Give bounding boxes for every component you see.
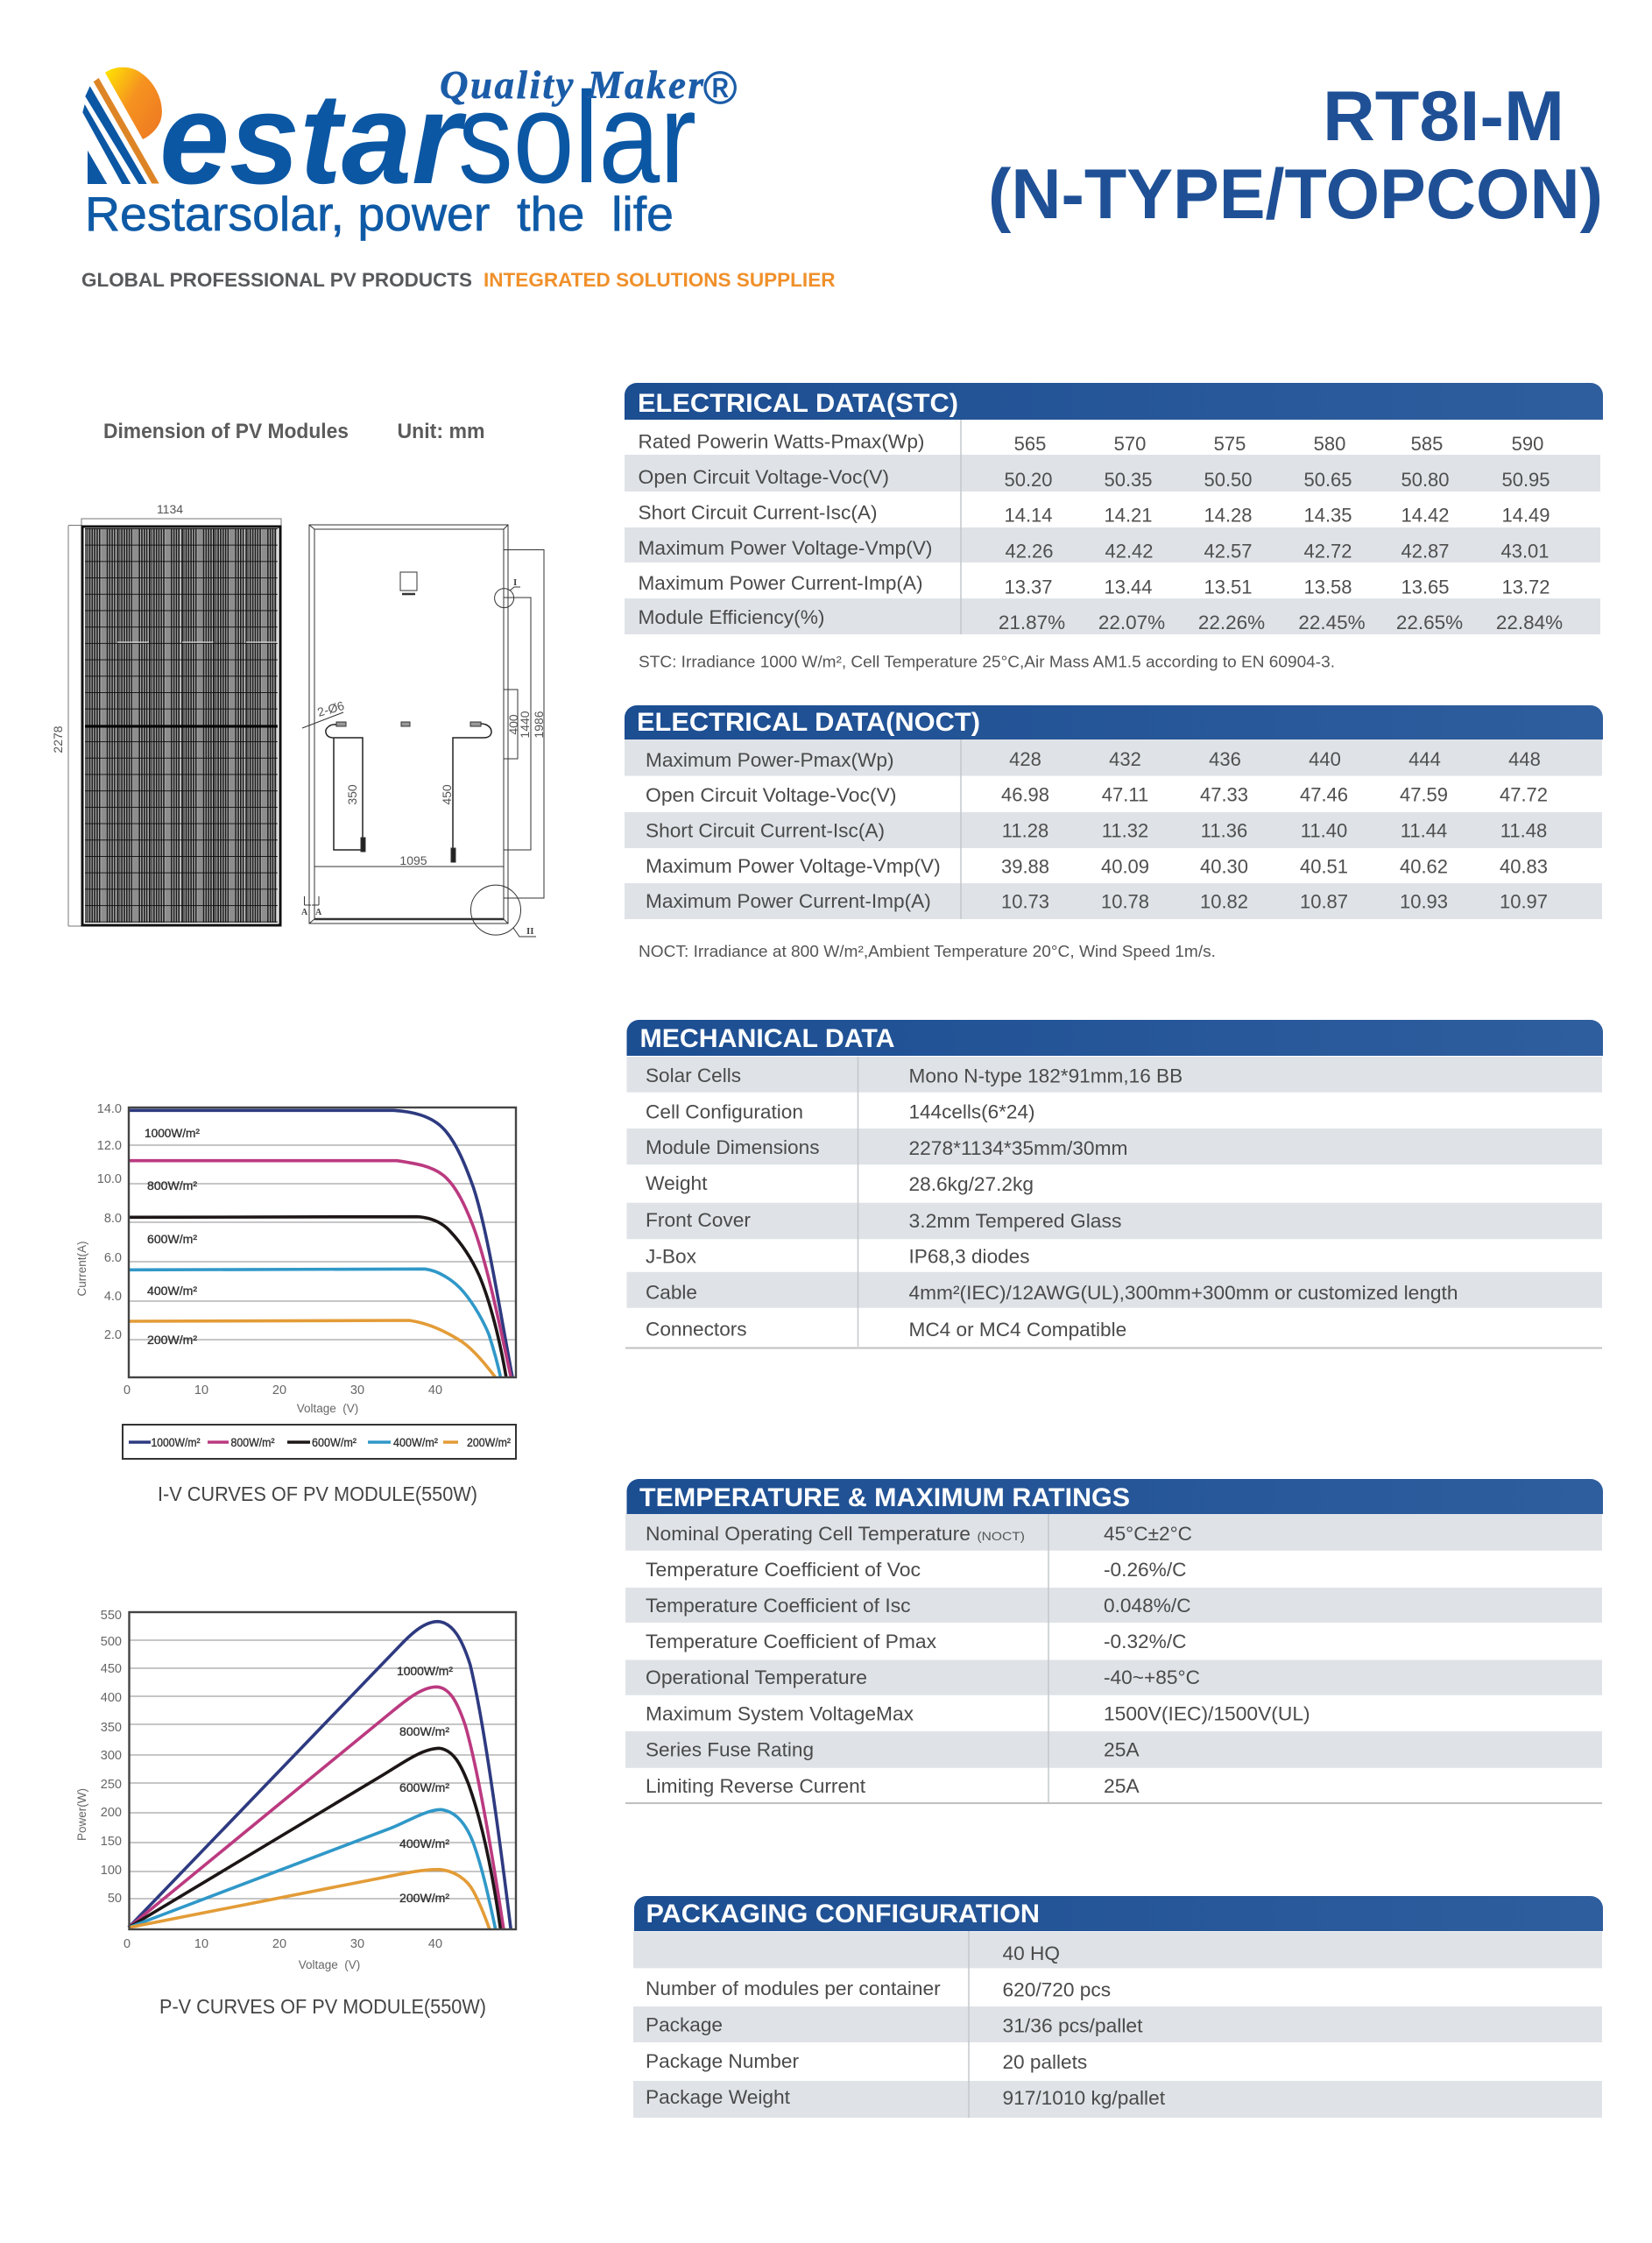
- row: efficiency: 22.26%: [1198, 612, 1265, 633]
- heading: dimensions: Dimension of PV Modules: [103, 420, 349, 443]
- curves: P-V: [129, 1622, 511, 1929]
- row: Imp: 10.97: [1500, 890, 1548, 913]
- row: weight: Weight: [646, 1172, 708, 1194]
- row: efficiency: 22.45%: [1298, 612, 1366, 633]
- row: rated power: Rated Powerin Watts-Pmax(Wp): [638, 431, 925, 452]
- row: Isc coefficient: 0.048%/C: [1104, 1595, 1191, 1617]
- row: efficiency: 21.87%: [999, 612, 1065, 633]
- title: (N-TYPE/TOPCON): [988, 155, 1603, 234]
- row: Isc: [638, 501, 1550, 526]
- row: Pmax coefficient: Temperature Coefficient of Pmax: [646, 1631, 937, 1652]
- row: Imp: Maximum Power Current-Imp(A): [646, 890, 931, 912]
- plot grid: [129, 1640, 516, 1899]
- row: Isc: 14.49: [1501, 505, 1550, 526]
- heading: packaging: PACKAGING CONFIGURATION: [646, 1900, 1040, 1928]
- note: NOCT conditions: NOCT: Irradiance at 800 W/m²,Ambient Temperature 20°C, Wind Speed 1m/s.: [639, 943, 1216, 960]
- heading: packaging: [634, 1896, 1603, 1931]
- panel: mechanical data: [625, 1020, 1603, 1348]
- company strapline: GLOBAL PROFESSIONAL PV PRODUCTS: [81, 269, 472, 291]
- panel: electrical data STC: [625, 383, 1603, 671]
- y axis labels: 4.0: [104, 1290, 122, 1304]
- caption: I-V curves: I-V CURVES OF PV MODULE(550W): [158, 1482, 477, 1505]
- row: Isc coefficient: Temperature Coefficient of Isc: [646, 1595, 911, 1617]
- row: rated power: 585: [1411, 433, 1443, 455]
- registered mark: ®: [703, 63, 737, 114]
- row: Voc: 50.80: [1401, 469, 1450, 491]
- row: cell configuration: 144cells(6*24): [909, 1100, 1035, 1123]
- heading: STC: ELECTRICAL DATA(STC): [638, 389, 958, 418]
- row: modules per container: [646, 1978, 1111, 2001]
- row: Vmp: 42.87: [1401, 540, 1450, 563]
- row: Imp: [638, 572, 1550, 598]
- row: J-box: IP68,3 diodes: [909, 1246, 1030, 1267]
- row: package weight: 917/1010 kg/pallet: [1002, 2087, 1166, 2109]
- y axis labels: [75, 1102, 122, 1342]
- curve labels: 600W/m²: [147, 1233, 198, 1246]
- rear view drawing: 1440: [518, 711, 532, 739]
- row: Imp: 10.87: [1300, 890, 1348, 913]
- row: rated power: 590: [1512, 433, 1543, 455]
- rear view drawing: A: [315, 908, 322, 917]
- y axis labels: 8.0: [104, 1212, 122, 1226]
- row: Vmp: 43.01: [1500, 540, 1550, 563]
- row: NOCT: (NOCT): [978, 1529, 1025, 1543]
- y axis labels: 10.0: [97, 1172, 122, 1186]
- rear view drawing: 1986: [532, 711, 546, 739]
- row: weight: [646, 1172, 1034, 1195]
- x axis labels: 0: [124, 1937, 131, 1951]
- row: rated power: [638, 431, 1543, 455]
- row: front cover: [646, 1209, 1121, 1232]
- row: Vmp: [646, 855, 1548, 878]
- row: reverse current: [646, 1775, 1140, 1797]
- x axis labels: 10: [194, 1383, 208, 1397]
- rear view drawing: 400: [506, 714, 520, 735]
- row: Voc coefficient: -0.26%/C: [1104, 1559, 1186, 1581]
- row: Isc: 14.21: [1104, 505, 1153, 526]
- rear view drawing: 450: [440, 784, 454, 805]
- panel: electrical data NOCT: [625, 705, 1603, 960]
- x axis labels: [124, 1383, 442, 1415]
- caption: P-V curves: P-V CURVES OF PV MODULE(550W): [159, 1995, 486, 2018]
- curve labels: 400W/m²: [399, 1837, 450, 1850]
- row: Imp: 13.37: [1004, 577, 1053, 598]
- row: series fuse: Series Fuse Rating: [646, 1738, 814, 1761]
- front view drawing: [51, 502, 281, 926]
- curve labels: 1000W/m²: [145, 1127, 200, 1140]
- row: Isc: 14.14: [1004, 505, 1053, 526]
- row: Voc: 47.46: [1300, 783, 1348, 806]
- row: NOCT: 45°C±2°C: [1104, 1523, 1192, 1545]
- title: RT8I-M: [1323, 77, 1564, 156]
- row: module dimensions: Module Dimensions: [646, 1136, 820, 1158]
- row: Isc: Short Circuit Current-Isc(A): [638, 501, 878, 524]
- curve labels: [145, 1127, 200, 1347]
- row: Vmp: 42.42: [1105, 540, 1154, 563]
- row: cable: Cable: [646, 1281, 697, 1304]
- y axis labels: Power(W): [75, 1788, 88, 1841]
- row: Voc: 47.33: [1200, 783, 1248, 806]
- row: Voc: 46.98: [1001, 783, 1049, 806]
- chart: I-V curves: [75, 1102, 516, 1505]
- row: Vmp: 42.57: [1204, 540, 1253, 563]
- row: Pmax: [646, 748, 1541, 771]
- row: efficiency: 22.65%: [1396, 612, 1463, 633]
- rear view drawing: 1095: [399, 853, 427, 867]
- row: Imp: 13.44: [1104, 577, 1153, 598]
- curve labels: 200W/m²: [147, 1334, 198, 1347]
- panel: packaging configuration: [633, 1896, 1603, 2118]
- row: Vmp: 40.83: [1500, 855, 1548, 878]
- row: Pmax: 448: [1508, 748, 1541, 770]
- curve labels: 400W/m²: [147, 1284, 198, 1298]
- row: weight: 28.6kg/27.2kg: [909, 1173, 1034, 1195]
- row: front cover: 3.2mm Tempered Glass: [909, 1210, 1121, 1232]
- row: Vmp: 42.72: [1303, 540, 1352, 563]
- y axis labels: 6.0: [104, 1251, 122, 1265]
- row: front cover: Front Cover: [646, 1209, 751, 1231]
- row: Voc: 47.72: [1500, 783, 1548, 806]
- row: rated power: 580: [1314, 433, 1345, 455]
- row: Imp: 10.73: [1001, 890, 1049, 913]
- row: efficiency: 22.07%: [1098, 612, 1165, 633]
- row: Imp: Maximum Power Current-Imp(A): [638, 572, 923, 594]
- row: cell configuration: [646, 1100, 1035, 1123]
- row: Isc: 11.48: [1500, 820, 1547, 841]
- heading: temperature: TEMPERATURE & MAXIMUM RATINGS: [639, 1483, 1130, 1512]
- row: series fuse: [646, 1738, 1140, 1761]
- heading: mechanical: [627, 1020, 1603, 1056]
- row: Imp: [646, 890, 1548, 913]
- rear view drawing: A: [301, 908, 308, 917]
- row: package: 31/36 pcs/pallet: [1002, 2015, 1143, 2036]
- logo: Restarsolar: [82, 63, 737, 241]
- row: efficiency: [638, 606, 1563, 633]
- y axis labels: 14.0: [97, 1102, 122, 1116]
- row: Isc: 11.28: [1002, 820, 1048, 841]
- row: Vmp: Maximum Power Voltage-Vmp(V): [646, 855, 941, 877]
- row: Voc coefficient: [646, 1559, 1186, 1581]
- y axis labels: 250: [101, 1778, 122, 1792]
- row: Isc: Short Circuit Current-Isc(A): [646, 820, 885, 841]
- icon: blue stripes: [82, 86, 147, 184]
- x axis labels: 30: [350, 1383, 364, 1397]
- row: J-box: [646, 1246, 1030, 1267]
- row: Pmax: 436: [1209, 748, 1241, 770]
- y axis labels: 450: [101, 1662, 122, 1676]
- y axis labels: 50: [108, 1892, 122, 1906]
- row: Voc: [638, 466, 1550, 491]
- row: operational temperature: -40~+85°C: [1104, 1666, 1200, 1688]
- rear view drawing: I: [513, 577, 517, 588]
- row: module dimensions: 2278*1134*35mm/30mm: [909, 1137, 1128, 1159]
- logo word: solar: solar: [458, 66, 696, 210]
- row: modules per container: 620/720 pcs: [1002, 1978, 1111, 2001]
- row: reverse current: 25A: [1104, 1775, 1140, 1797]
- row: rated power: 575: [1214, 433, 1246, 455]
- y axis labels: 550: [101, 1609, 122, 1623]
- panel: dimensions of PV modules: [51, 420, 546, 937]
- row: Isc: [646, 820, 1547, 841]
- rear view drawing: [301, 525, 546, 937]
- row: efficiency: 22.84%: [1496, 612, 1563, 633]
- row: maximum system voltage: [646, 1703, 1310, 1724]
- y axis labels: 300: [101, 1749, 122, 1763]
- row: Imp: 10.93: [1400, 890, 1448, 913]
- front view drawing: 2278: [51, 725, 65, 754]
- row: package number: Package Number: [646, 2050, 800, 2072]
- row: Voc: 50.50: [1204, 469, 1253, 491]
- y axis labels: 400: [101, 1691, 122, 1705]
- x axis labels: Voltage (V): [299, 1958, 360, 1971]
- x axis labels: 10: [194, 1937, 208, 1951]
- x axis labels: 20: [272, 1937, 286, 1951]
- row: Isc: 11.44: [1401, 820, 1447, 841]
- row: NOCT: Nominal Operating Cell Temperature: [646, 1523, 971, 1545]
- row: Voc: Open Circuit Voltage-Voc(V): [638, 466, 889, 488]
- row: Isc: 14.42: [1401, 505, 1450, 526]
- panel: temperature and maximum ratings: [625, 1479, 1603, 1803]
- row: Imp: 13.65: [1401, 577, 1450, 598]
- rear view drawing: 2-Ø6: [315, 698, 346, 719]
- rear view drawing: II: [526, 926, 534, 937]
- row: Imp: 10.82: [1200, 890, 1248, 913]
- x axis labels: 30: [350, 1937, 364, 1951]
- plot grid and frame: [129, 1145, 516, 1340]
- x axis labels: Voltage (V): [297, 1402, 358, 1415]
- row: Isc: 14.35: [1303, 505, 1352, 526]
- y axis labels: Current(A): [75, 1241, 88, 1297]
- y axis labels: 500: [101, 1635, 122, 1649]
- row: package weight: [646, 2086, 1166, 2109]
- row: Voc: 50.65: [1303, 469, 1352, 491]
- y axis labels: 350: [101, 1721, 122, 1735]
- row: Isc: 14.28: [1204, 505, 1253, 526]
- row: Voc coefficient: Temperature Coefficient of Voc: [646, 1559, 921, 1581]
- y axis labels: 200: [101, 1806, 122, 1820]
- row: Voc: 50.35: [1104, 469, 1153, 491]
- row: cable: 4mm²(IEC)/12AWG(UL),300mm+300mm or customized length: [909, 1282, 1458, 1304]
- row: rated power: 565: [1014, 433, 1046, 455]
- row: solar cells: [646, 1065, 1183, 1086]
- row: Voc: 47.11: [1102, 783, 1148, 806]
- legend: 600W/m²: [312, 1436, 357, 1449]
- row: reverse current: Limiting Reverse Current: [646, 1775, 866, 1797]
- row: cable: [646, 1281, 1458, 1304]
- row: Pmax: 428: [1009, 748, 1041, 770]
- curve labels: 1000W/m²: [397, 1665, 454, 1678]
- row: package number: 20 pallets: [1002, 2051, 1087, 2073]
- row: Voc: 50.95: [1501, 469, 1550, 491]
- legend: 400W/m²: [393, 1436, 438, 1449]
- icon: orange stripe: [94, 78, 159, 184]
- row: Isc coefficient: [646, 1595, 1191, 1617]
- logo tagline: Restarsolar, power the life: [85, 187, 674, 241]
- curves: I-V: [129, 1110, 512, 1377]
- rear view drawing: 350: [345, 784, 359, 805]
- row: Pmax: Maximum Power-Pmax(Wp): [646, 749, 894, 771]
- row: maximum system voltage: Maximum System VoltageMax: [646, 1703, 914, 1724]
- row: Vmp: [638, 537, 1550, 563]
- legend: 200W/m²: [467, 1436, 511, 1449]
- row: Isc: 11.32: [1102, 820, 1148, 841]
- chart: P-V curves: [75, 1609, 516, 2018]
- row: series fuse: 25A: [1104, 1738, 1140, 1761]
- row: NOCT: [646, 1523, 1192, 1545]
- heading: dimensions: [103, 420, 485, 443]
- row: J-box: J-Box: [646, 1246, 697, 1267]
- icon: sun: [105, 67, 162, 139]
- curve labels: 800W/m²: [399, 1725, 450, 1738]
- row: Pmax coefficient: [646, 1631, 1186, 1652]
- row: Pmax coefficient: -0.32%/C: [1104, 1631, 1186, 1652]
- row: solar cells: Solar Cells: [646, 1065, 741, 1086]
- row: Imp: 13.51: [1204, 577, 1253, 598]
- row: connectors: MC4 or MC4 Compatible: [909, 1319, 1126, 1341]
- row: Vmp: Maximum Power Voltage-Vmp(V): [638, 537, 932, 559]
- row: Imp: 13.72: [1501, 577, 1550, 598]
- row: Vmp: 42.26: [1005, 540, 1054, 563]
- note: STC conditions: STC: Irradiance 1000 W/m², Cell Temperature 25°C,Air Mass AM1.5 according to EN 60904-3.: [639, 654, 1335, 671]
- row: modules per container: Number of modules per container: [646, 1978, 941, 1999]
- row: solar cells: Mono N-type 182*91mm,16 BB: [909, 1065, 1183, 1086]
- x axis labels: 0: [124, 1383, 131, 1397]
- heading: NOCT: ELECTRICAL DATA(NOCT): [637, 708, 980, 737]
- heading: STC: [625, 383, 1603, 420]
- row: Vmp: 40.62: [1400, 855, 1448, 878]
- row: Voc: [646, 783, 1548, 806]
- row: Voc: 47.59: [1400, 783, 1448, 806]
- front view drawing: 1134: [157, 502, 183, 516]
- heading: dimensions: Unit: mm: [398, 420, 485, 443]
- y axis labels: 2.0: [104, 1328, 122, 1342]
- row: Imp: 10.78: [1101, 890, 1149, 913]
- row: rated power: 570: [1114, 433, 1146, 455]
- row: Vmp: 40.51: [1300, 855, 1348, 878]
- row: Isc: 11.40: [1301, 820, 1347, 841]
- heading: temperature: [627, 1479, 1603, 1514]
- curve labels: 800W/m²: [147, 1179, 198, 1192]
- row: Vmp: 40.09: [1101, 855, 1149, 878]
- heading: mechanical: MECHANICAL DATA: [639, 1024, 895, 1053]
- company strapline: INTEGRATED SOLUTIONS SUPPLIER: [484, 269, 836, 291]
- row: package number: [646, 2050, 1087, 2073]
- row: Isc: 11.36: [1201, 820, 1247, 841]
- y axis labels: 12.0: [97, 1139, 122, 1153]
- y axis labels: 100: [101, 1864, 122, 1878]
- row: Voc: Open Circuit Voltage-Voc(V): [646, 784, 897, 806]
- row: cell configuration: Cell Configuration: [646, 1100, 803, 1123]
- curve labels: [397, 1665, 454, 1905]
- row: Pmax: 432: [1109, 748, 1141, 770]
- row: connectors: Connectors: [646, 1318, 747, 1341]
- x axis labels: 20: [272, 1383, 286, 1397]
- row: Voc: 50.20: [1004, 469, 1053, 491]
- legend: 800W/m²: [231, 1436, 275, 1449]
- row: operational temperature: [646, 1666, 1200, 1688]
- x axis labels: [124, 1937, 442, 1971]
- row: module dimensions: [646, 1136, 1128, 1159]
- row: container: 40 HQ: [1002, 1942, 1060, 1964]
- row: connectors: [646, 1318, 1126, 1341]
- row: Pmax: 444: [1408, 748, 1441, 770]
- row: package: Package: [646, 2013, 723, 2036]
- x axis labels: 40: [428, 1937, 442, 1951]
- legend: 1000W/m²: [151, 1436, 201, 1449]
- logo word: estar: estar: [159, 67, 467, 211]
- x axis labels: 40: [428, 1383, 442, 1397]
- row: Vmp: 39.88: [1001, 855, 1049, 878]
- row: Pmax: 440: [1309, 748, 1341, 770]
- row: operational temperature: Operational Temperature: [646, 1666, 867, 1688]
- row: Imp: 13.58: [1303, 577, 1352, 598]
- row: package weight: Package Weight: [646, 2086, 791, 2108]
- heading: NOCT: [625, 705, 1603, 739]
- title: [988, 77, 1603, 234]
- logo slogan: Quality Maker: Quality Maker: [440, 63, 703, 107]
- curve labels: 200W/m²: [399, 1892, 450, 1905]
- company strapline: [81, 269, 836, 291]
- y axis labels: [75, 1609, 122, 1906]
- row: package: [646, 2013, 1143, 2036]
- y axis labels: 150: [101, 1835, 122, 1849]
- row: efficiency: Module Efficiency(%): [638, 606, 825, 628]
- row: maximum system voltage: 1500V(IEC)/1500V(UL): [1104, 1703, 1310, 1724]
- legend: [123, 1425, 516, 1459]
- curve labels: 600W/m²: [399, 1781, 450, 1794]
- row: Vmp: 40.30: [1200, 855, 1248, 878]
